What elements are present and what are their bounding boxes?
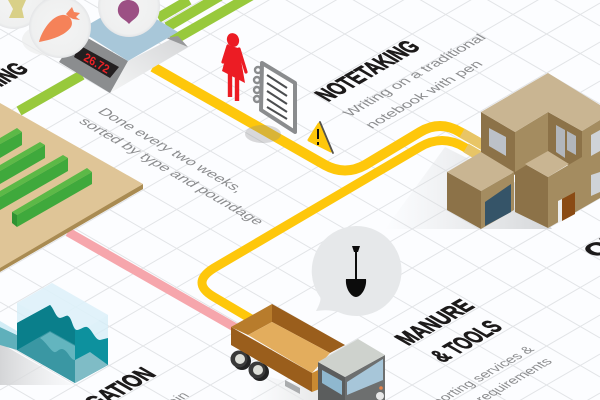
water rear shade [17,305,75,350]
wheels [230,350,269,381]
text: done every two weeks: Done every two weeks, [94,105,249,195]
exclamation mark [317,129,319,145]
text: notetaking description: Writing on a traditional [339,31,489,119]
bed end [312,368,322,392]
person shadow [245,125,281,143]
text: done every two weeks: sorted by type and poundage [75,115,269,227]
scale reading: 26.72 [82,50,112,77]
scale plate [79,2,178,61]
notebook icon [254,63,295,132]
recess door window [556,125,565,158]
right wall [548,120,600,228]
headlight [376,392,384,400]
recess back wall [548,112,582,166]
garage door [485,184,511,226]
warning icon [309,122,333,153]
scale [59,2,188,93]
bed front side [231,327,312,392]
cab right face [345,355,385,400]
crop row 4 [12,168,92,227]
heading: manure and tools: & TOOLS [424,317,509,366]
crop row 3 [0,155,68,210]
indicator [379,386,383,390]
recess window [567,131,576,155]
produce: carrot bubble [22,0,91,58]
inner end wall [231,304,272,335]
water tank [0,283,108,383]
produce: leek bubble [0,0,45,29]
house [447,73,600,229]
main left wall [481,112,515,175]
leek [8,0,26,18]
scale side [110,37,188,93]
door [562,192,575,221]
faded road ends near house [462,133,490,162]
shovel [346,246,366,297]
house ground shadow [385,147,552,229]
scale display [74,45,119,78]
green roads [19,0,254,111]
bed floor [248,322,330,373]
text: notetaking description: notebook with pen [361,58,486,131]
heading: notetaking: NOTETAKING [309,37,427,105]
carrot [39,7,80,42]
water right lower [75,352,108,383]
water body [17,305,108,383]
beet [118,0,139,24]
notebook rings [254,67,261,102]
heading: manure and tools: MANURE [389,296,481,349]
right windows [591,130,600,196]
crop row 2 [0,142,45,184]
produce: beet bubble [98,0,160,37]
heading: manure and tools [389,296,509,366]
plot surface [0,103,143,268]
cab windows [322,370,342,395]
truck ground shadow [250,372,320,400]
inner long wall [272,304,345,353]
text: notetaking description [339,31,489,131]
tank ground shadow [0,343,73,385]
garage right wall [481,172,514,229]
tank glass [17,283,108,383]
speech bubble with shovel [312,226,402,316]
plot edge [0,184,143,272]
yellow road from scale [153,67,490,170]
left window [489,128,506,156]
scale front [59,33,128,93]
inlet pipe [0,327,17,350]
scale hinge [166,36,188,47]
cab roof [318,339,385,377]
crop row 1 [0,128,22,158]
notebook lines [267,75,287,119]
central wall [515,132,548,228]
field plot [0,103,143,272]
cab left face [318,362,345,400]
garage left wall [447,172,481,229]
recess side wall [515,112,548,172]
axle [285,380,300,394]
pink road [68,232,236,328]
yellow road to truck [202,140,490,323]
main roof [481,73,600,132]
white door frame [558,199,562,223]
water front lower [17,331,75,383]
balcony top [525,151,569,177]
garage roof [447,152,514,191]
truck [230,304,385,400]
person icon [222,31,246,101]
water wave light [40,332,75,360]
